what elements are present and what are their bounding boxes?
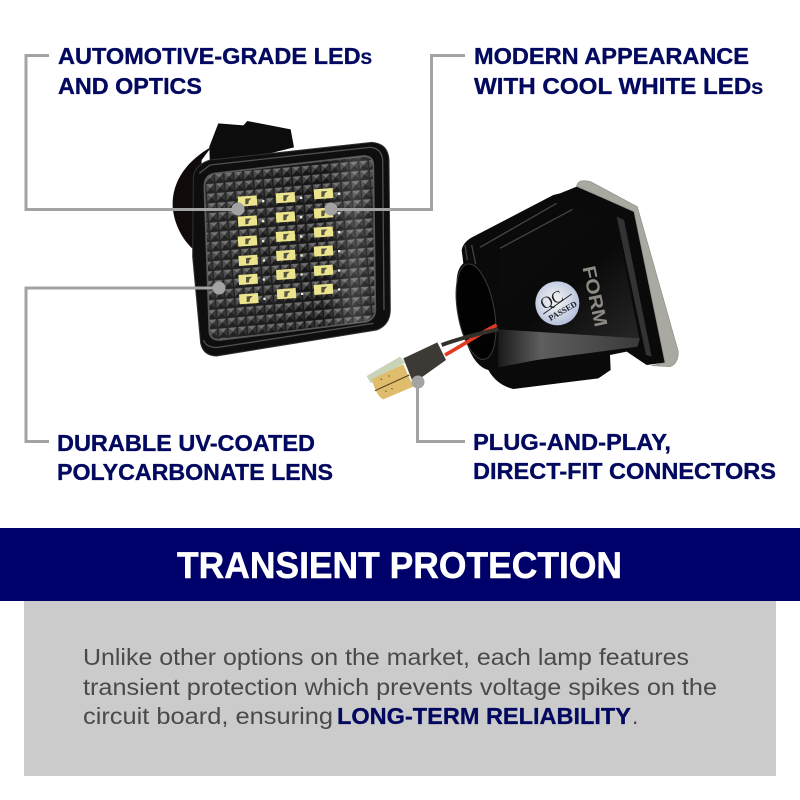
QC passed sticker: PASSED: [547, 299, 579, 323]
LED array: [238, 188, 340, 304]
clear lens edge: [577, 181, 678, 367]
label: automotive-grade LEDs: AUTOMOTIVE-GRADE LEDS: [58, 43, 372, 69]
upper tab highlight: [465, 203, 573, 264]
black wire: [442, 329, 498, 345]
QC passed sticker: QC: [537, 286, 566, 313]
callout connector: automotive-grade LEDs: [26, 56, 244, 216]
FORM logo: FORM: [578, 264, 612, 328]
label: modern appearance: WITH COOL WHITE LED S: [474, 73, 763, 99]
label: plug-and-play connectors: [473, 429, 776, 484]
cone lower reflection: [498, 329, 640, 367]
label: durable lens: [57, 430, 333, 485]
contact dots: [381, 375, 393, 392]
lens sheen: [204, 156, 375, 340]
banner heading: TRANSIENT PROTECTION: [177, 545, 622, 586]
label: modern appearance: MODERN APPEARANCE: [474, 43, 749, 69]
body text: transient protection which prevents voltage spikes on the: [83, 674, 717, 700]
product photo: lamp rear with connector: [367, 181, 678, 399]
body text: LONG-TERM RELIABILITY: [337, 703, 631, 729]
PCB edge: [367, 357, 405, 383]
lens with pyramid optics: [204, 156, 375, 340]
body text: Unlike other options on the market, each lamp features: [83, 644, 689, 670]
label: durable lens: POLYCARBONATE LENS: [57, 459, 333, 485]
label: automotive-grade LEDs: AND OPTICS: [58, 73, 202, 99]
red wire: [445, 325, 497, 355]
label: modern appearance: [474, 43, 763, 99]
body text: .: [632, 703, 638, 729]
body text: circuit board, ensuring: [83, 703, 333, 729]
gold PCB contacts: [372, 364, 413, 399]
callout connector: modern appearance: [324, 56, 465, 216]
label: durable lens: DURABLE UV-COATED: [57, 430, 315, 456]
label: automotive-grade LEDs: [58, 43, 372, 99]
rounded housing back: [173, 147, 212, 252]
mounting bracket: [209, 121, 294, 168]
callout connector: plug-and-play: [412, 376, 465, 442]
cone body: [498, 211, 639, 338]
panel: transient protection text: [24, 601, 776, 776]
product photo: lamp front with LED lens: [173, 121, 390, 356]
connector housing: [403, 342, 446, 383]
cylinder opening: [450, 261, 502, 362]
frame highlights: [199, 147, 384, 347]
label: plug-and-play connectors: PLUG-AND-PLAY,: [473, 429, 671, 455]
banner: transient protection: [0, 528, 800, 601]
flange sheen: [617, 217, 652, 357]
QC passed sticker: [535, 281, 579, 325]
body text: [83, 644, 717, 729]
label: plug-and-play connectors: DIRECT-FIT CONNECTORS: [473, 458, 776, 484]
overall black silhouette: [457, 187, 665, 389]
PCB contact divider: [375, 375, 409, 391]
callout connector: UV-coated lens: [26, 282, 226, 442]
lamp outer frame: [193, 142, 390, 356]
